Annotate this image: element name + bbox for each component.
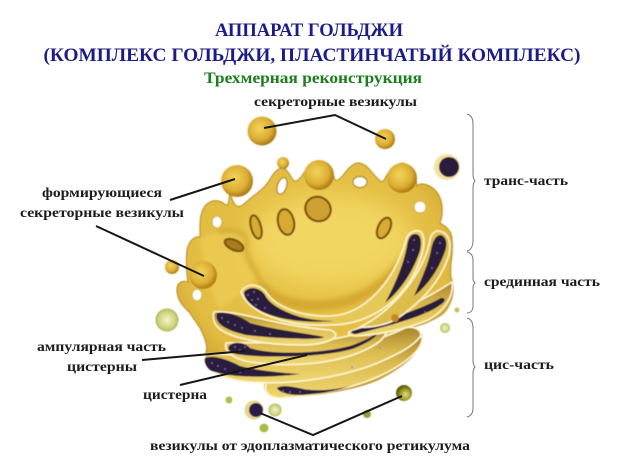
- vesicle: tiny green bottom left: [226, 396, 232, 404]
- vesicle: orange small: [391, 314, 399, 322]
- leader: forming vesicle lower: [96, 226, 204, 276]
- granules: [211, 239, 441, 393]
- subtitle: Трехмерная реконструкция: [204, 70, 422, 87]
- cisterna A outer right: [360, 231, 450, 327]
- lobe shading: [200, 232, 256, 310]
- vesicle: small left: [165, 260, 179, 274]
- vesicle: pale green left: [156, 308, 178, 332]
- label: ER vesicles: везикулы от эдоплазматического ретикулума: [150, 439, 470, 454]
- label: ampullar part of cisterna: [37, 340, 167, 375]
- vesicle: green bottom: [268, 404, 282, 416]
- vesicle: upper left secretory: [248, 116, 276, 146]
- leader lines: [96, 115, 402, 435]
- cisterna D: [226, 328, 386, 365]
- bracket: trans: [467, 114, 475, 251]
- label: forming secretory vesicles: секреторные везикулы: [20, 206, 184, 221]
- bracket: medial: [467, 252, 475, 313]
- leader: secretory vesicles: [264, 115, 386, 139]
- label: ampullar part of cisterna: цистерны: [67, 360, 137, 375]
- label: cisterna: цистерна: [143, 388, 207, 403]
- vesicle: dark ER vesicle: [244, 400, 264, 420]
- cisterna B: [213, 312, 336, 345]
- central cup: [248, 195, 412, 285]
- vesicle: green right: [440, 323, 450, 333]
- labels: [20, 95, 601, 454]
- label: forming secretory vesicles: [20, 186, 184, 221]
- cisterna A inner bowl: [241, 231, 424, 325]
- bracket: cis: [467, 318, 475, 417]
- lobe ridge shading: [218, 231, 262, 286]
- leader: forming vesicle upper: [170, 179, 235, 200]
- white openings in membrane: [192, 176, 426, 301]
- budding lobes: [189, 157, 417, 289]
- vesicle: olive bottom right: [396, 385, 412, 401]
- cisterna F: [265, 336, 422, 398]
- title: [44, 20, 580, 66]
- label: ampullar part of cisterna: ампулярная часть: [37, 340, 167, 355]
- golgi body silhouette: [177, 162, 453, 398]
- label: secretory vesicles: секреторные везикулы: [254, 95, 417, 110]
- title: АППАРАТ ГОЛЬДЖИ: [215, 20, 403, 41]
- vesicle: dark upper right: [434, 154, 460, 180]
- cup lower shading: [262, 262, 402, 306]
- vesicle: tiny green right: [454, 308, 460, 312]
- curly brackets: [467, 114, 475, 417]
- cisterna E: [205, 327, 421, 383]
- leader: ER vesicles: [260, 396, 402, 435]
- leader: ampullar part: [142, 351, 245, 360]
- golgi apparatus illustration: [156, 116, 460, 432]
- label: forming secretory vesicles: формирующиеся: [42, 186, 162, 201]
- label: medial part: срединная часть: [484, 275, 601, 290]
- fenestrations: [223, 192, 394, 254]
- leader: cisterna: [180, 355, 307, 385]
- golgi cisternae stack: [205, 231, 452, 398]
- label: cis part: цис-часть: [484, 358, 555, 373]
- vesicle: small green bottom right: [363, 410, 371, 418]
- cisterna C: [348, 282, 452, 336]
- vesicle: small green bottom: [260, 424, 268, 432]
- title: (КОМПЛЕКС ГОЛЬДЖИ, ПЛАСТИНЧАТЫЙ КОМПЛЕКС): [44, 44, 580, 66]
- label: trans part: транс-часть: [484, 174, 569, 189]
- vesicle: upper right secretory: [375, 129, 395, 149]
